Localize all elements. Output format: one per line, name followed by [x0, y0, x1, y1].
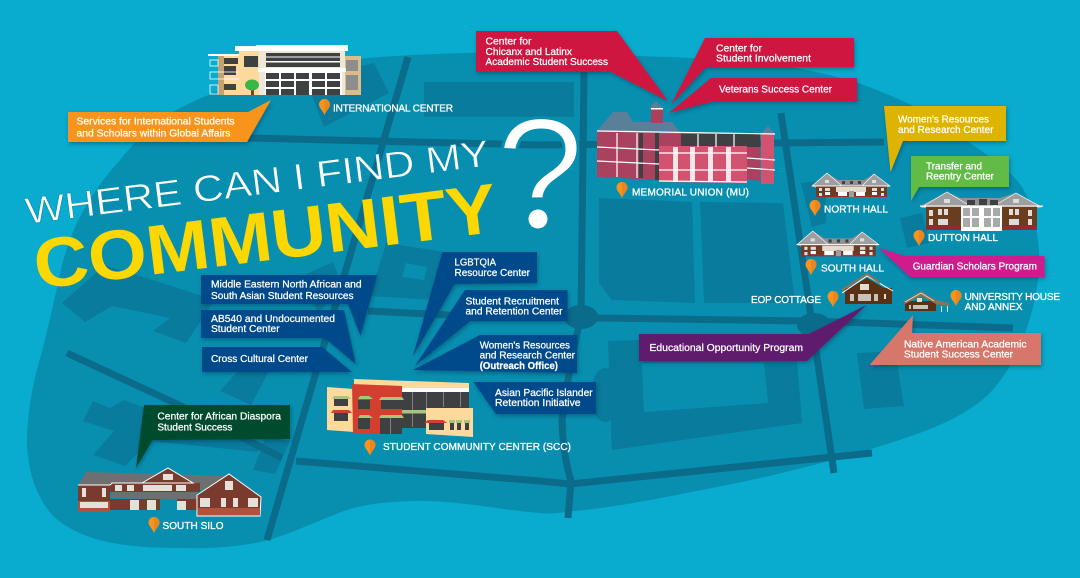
label: University House and Annex: AND ANNEX	[965, 302, 1023, 313]
callout: Women's Resources and Research Center: Women's Resources	[898, 114, 989, 126]
building: Dutton Hall	[920, 192, 1043, 231]
callout: Student Recruitment and Retention Center: and Retention Center	[466, 306, 563, 318]
building: University House and Annex	[903, 291, 949, 312]
callout: Cross Cultural Center: Cross Cultural Center	[211, 354, 309, 365]
callout: Services for International Students: and Scholars within Global Affairs	[76, 128, 230, 140]
label: International Center: INTERNATIONAL CENTER	[333, 104, 453, 114]
callout: Women's Resources Outreach Office: and Research Center	[480, 350, 576, 362]
label: North Hall	[810, 200, 888, 216]
callout: Asian Pacific Islander Retention Initiative: Retention Initiative	[495, 398, 581, 409]
callout: Native American Academic Student Success Center: Native American Academic	[904, 340, 1026, 350]
label: South Hall	[806, 259, 884, 275]
building: Memorial Union	[597, 101, 775, 184]
callout: Native American Academic Student Success Center: Student Success Center	[904, 350, 1014, 360]
callout: Women's Resources and Research Center: and Research Center	[898, 125, 994, 136]
callout: Chicanx and Latinx: Center for	[486, 36, 532, 48]
building: North Hall	[812, 173, 890, 197]
callout: Center for Student Involvement: Student Involvement	[716, 54, 811, 64]
callout: Cross Cultural Center	[202, 347, 352, 372]
callout: AB540 and Undocumented Student Center: AB540 and Undocumented	[211, 314, 335, 325]
callout: Women's Resources Outreach Office: Women's Resources	[480, 340, 570, 352]
label: Memorial Union: MEMORIAL UNION (MU)	[632, 188, 749, 198]
label: South Silo: SOUTH SILO	[162, 521, 224, 532]
label: University House and Annex: UNIVERSITY HOUSE	[965, 292, 1060, 303]
callout: Transfer and Reentry Center: Transfer and	[926, 162, 982, 172]
label: Memorial Union	[616, 182, 749, 198]
label: Student Community Center: STUDENT COMMUNITY CENTER (SCC)	[383, 442, 571, 453]
callout: Center for Student Involvement: Center for	[716, 44, 763, 54]
label: South Silo	[148, 517, 224, 533]
label: EOP Cottage	[751, 291, 838, 307]
callout: LGBTQIA Resource Center: LGBTQIA	[454, 258, 496, 268]
callout: Middle Eastern North African and South Asian: Middle Eastern North African and	[211, 280, 362, 290]
callout: Services for International Students	[68, 100, 271, 142]
callout: Guardian Scholars Program: Guardian Scholars Program	[913, 262, 1037, 272]
callout: Services for International Students: Services for International Students	[76, 116, 234, 128]
callout: Center for African Diaspora Student Success: Student Success	[157, 422, 232, 434]
label: North Hall: NORTH HALL	[824, 204, 888, 216]
callout: Center for African Diaspora Student Success	[136, 405, 290, 468]
callout: Middle Eastern North African and South Asian: South Asian Student Resources	[211, 291, 354, 302]
callout: Middle Eastern North African and South Asian	[201, 275, 377, 336]
callout: Women's Resources and Research Center	[884, 106, 1006, 172]
heading: Community: COMMUNITY	[29, 169, 501, 304]
building: International Center	[208, 45, 361, 95]
callout: Center for Student Involvement	[671, 38, 854, 105]
label: EOP Cottage: EOP COTTAGE	[751, 295, 821, 306]
label: Student Community Center	[364, 440, 571, 456]
label: University House and Annex	[950, 290, 1060, 313]
callout: Educational Opportunity Program: Educational Opportunity Program	[650, 343, 803, 354]
callout: Guardian Scholars Program	[879, 248, 1044, 277]
heading: question mark: ?	[496, 86, 584, 262]
heading: Where can I find my: WHERE CAN I FIND MY	[23, 133, 491, 232]
callout: Veterans Success Center	[669, 78, 857, 113]
callout: Women's Resources Outreach Office: (Outreach Office)	[480, 361, 558, 372]
label: Dutton Hall: DUTTON HALL	[928, 233, 998, 244]
callout: Native American Academic Student Success Center	[870, 315, 1041, 365]
callout: Asian Pacific Islander Retention Initiative: Asian Pacific Islander	[495, 388, 593, 399]
callout: Student Recruitment and Retention Center	[415, 290, 568, 366]
label: South Hall: SOUTH HALL	[821, 264, 884, 274]
callout: Educational Opportunity Program	[639, 305, 866, 361]
callout: Center for African Diaspora Student Success: Center for African Diaspora	[157, 412, 281, 422]
building: South Hall	[797, 231, 879, 256]
callout: Transfer and Reentry Center: Reentry Center	[926, 172, 995, 182]
callout: Veterans Success Center: Veterans Success Center	[719, 84, 833, 96]
callout: Student Recruitment and Retention Center: Student Recruitment	[466, 296, 559, 308]
callout: AB540 and Undocumented Student Center	[201, 310, 356, 364]
callout: AB540 and Undocumented Student Center: Student Center	[211, 324, 280, 335]
building: Student Community Center	[327, 379, 473, 437]
label: Dutton Hall	[914, 230, 998, 246]
callout: Asian Pacific Islander Retention Initiative	[474, 382, 596, 414]
callout: Chicanx and Latinx: Academic Student Success	[486, 57, 608, 68]
callout: Women's Resources Outreach Office	[413, 335, 577, 373]
callout: Chicanx and Latinx: Chicanx and Latinx	[486, 47, 572, 58]
callout: LGBTQIA Resource Center: Resource Center	[454, 268, 531, 279]
building: EOP Cottage	[842, 274, 893, 304]
callout: LGBTQIA Resource Center	[413, 252, 537, 356]
label: International Center	[319, 99, 453, 115]
callout: Transfer and Reentry Center	[911, 156, 1009, 201]
callout: Chicanx and Latinx	[476, 31, 668, 101]
building: South Silo	[78, 468, 261, 516]
